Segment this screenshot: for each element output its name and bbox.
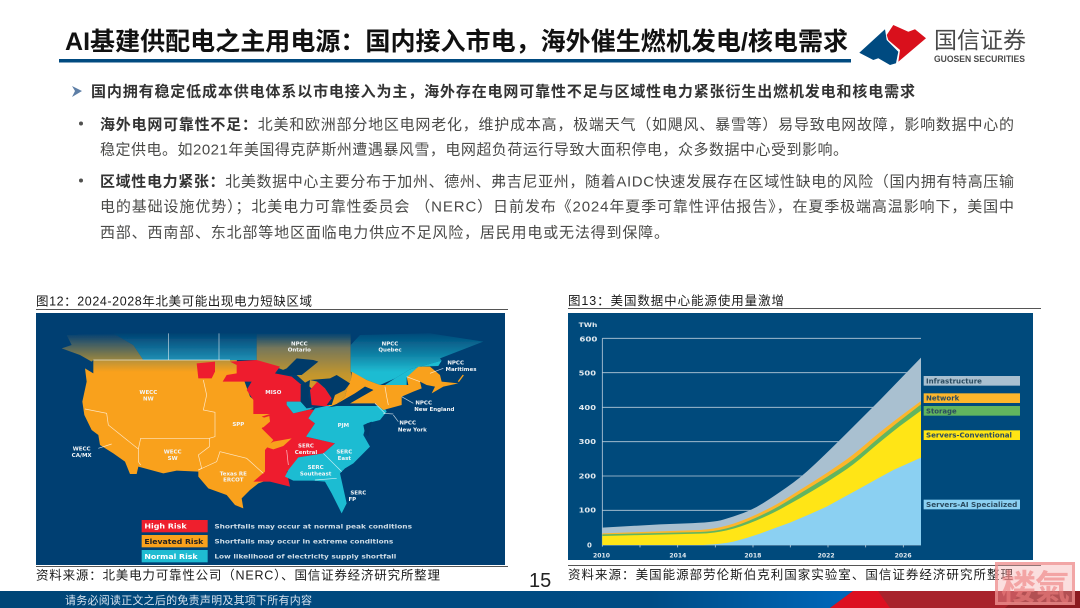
- gridlines and axis: [602, 338, 921, 547]
- map labels: NPCC: [291, 341, 308, 347]
- chart axis labels: 100: [579, 507, 596, 515]
- chart panel: US data center energy use: [568, 313, 1033, 560]
- chart axis labels: 600: [579, 336, 597, 344]
- page number: 15: [529, 570, 551, 592]
- map regions: [62, 333, 483, 513]
- chart axis labels: 0: [587, 541, 592, 549]
- logo: Guosen Securities: [859, 25, 1026, 65]
- map labels: NPCC: [382, 341, 398, 347]
- map labels: SPP: [232, 422, 244, 428]
- footer bar: [0, 591, 1080, 608]
- map labels: NPCC: [447, 361, 464, 367]
- chart axis labels: 2014: [669, 552, 686, 559]
- map panel: North America shortage risk: [36, 313, 505, 565]
- text block: grid reliability: 稳定供电。如2021年美国得克萨斯州遭遇暴风雪，电网超负荷运行导致大面积停电，众多数据中心受到影响。: [100, 142, 848, 158]
- chart legend: Storage: [926, 407, 957, 415]
- map labels: New York: [398, 428, 427, 434]
- map labels: WECC: [73, 447, 91, 453]
- map labels: NPCC: [415, 401, 432, 407]
- chart legend: Infrastructure: [926, 377, 983, 385]
- map labels: SERC: [298, 444, 314, 450]
- source: figure 12: 资料来源：北美电力可靠性公司（NERC）、国信证券经济研究所整理: [36, 568, 440, 582]
- chart legend: Network: [926, 394, 960, 402]
- map labels: Quebec: [378, 348, 402, 354]
- chart axis labels: 2010: [593, 552, 610, 559]
- map labels: [72, 341, 476, 503]
- map labels: FP: [348, 497, 356, 503]
- map labels: Central: [295, 450, 317, 456]
- map legend: Normal Risk: [144, 553, 198, 561]
- map legend: High Risk: [144, 523, 187, 531]
- map labels: NW: [143, 396, 154, 402]
- map legend: Shortfalls may occur at normal peak conditions: [214, 523, 412, 530]
- map labels: Texas RE: [220, 471, 247, 477]
- map labels: Ontario: [288, 348, 311, 354]
- map labels: PJM: [338, 423, 349, 429]
- logo: Guosen Securities: 国信证券: [934, 27, 1026, 53]
- map labels: SW: [168, 456, 178, 462]
- logo: Guosen Securities: GUOSEN SECURITIES: [934, 54, 1025, 64]
- text block: regional power shortage: 西部、西南部、东北部等地区面临电力供应不足风险，居民用电或无法得到保障。: [100, 224, 669, 242]
- text block: grid reliability: 海外电网可靠性不足：北美和欧洲部分地区电网老化，维护成本高，极端天气（如飓风、暴雪等）易导致电网故障，影响数据中心的: [100, 116, 1014, 134]
- chart axis labels: 500: [579, 369, 596, 377]
- footer bar: 请务必阅读正文之后的免责声明及其项下所有内容: [65, 593, 312, 607]
- text block: grid reliability: [79, 116, 1014, 158]
- map labels: WECC: [164, 450, 182, 456]
- text block: regional power shortage: [79, 172, 1014, 242]
- map labels: NPCC: [399, 420, 416, 426]
- lead bullet: 国内拥有稳定低成本供电体系以市电接入为主，海外存在电网可靠性不足与区域性电力紧张衍生出燃机发电和核电需求: [91, 82, 915, 100]
- map labels: Southeast: [300, 471, 332, 477]
- watermark stamp: 楼氣: [1001, 569, 1070, 608]
- map region boundaries: [85, 333, 443, 480]
- caption: figure 12: 图12：2024-2028年北美可能出现电力短缺区域: [36, 294, 312, 308]
- map labels: CA/MX: [72, 453, 92, 459]
- text block: regional power shortage: 电的基础设施优势）；北美电力可靠性委员会 （NERC）日前发布《2024年夏季可靠性评估报告》，在夏季极端高温影响下，美国中: [100, 198, 1014, 216]
- caption: figure 13: 图13：美国数据中心能源使用量激增: [568, 293, 784, 308]
- chart axis labels: 2022: [818, 552, 835, 559]
- chart legend: [924, 376, 1020, 509]
- chart axis labels: 300: [579, 438, 596, 446]
- chart axis labels: 200: [579, 472, 596, 480]
- map labels: SERC: [350, 491, 366, 497]
- map labels: WECC: [139, 390, 157, 396]
- chart axis labels: 2026: [895, 552, 912, 559]
- map labels: MISO: [265, 390, 282, 396]
- title: AI基建供配电之主用电源：国内接入市电，海外催生燃机发电/核电需求: [65, 27, 848, 56]
- map labels: New England: [414, 407, 455, 413]
- map legend: Elevated Risk: [144, 538, 204, 546]
- map labels: Maritimes: [446, 367, 476, 373]
- stacked area chart: [602, 358, 921, 545]
- chart axis labels: 2018: [744, 552, 761, 559]
- map legend: Low likelihood of electricity supply shortfall: [214, 553, 396, 560]
- chart axis labels: [579, 322, 912, 559]
- map labels: SERC: [308, 465, 324, 471]
- map labels: SERC: [336, 450, 352, 456]
- chart legend: Servers-AI Specialized: [926, 501, 1018, 509]
- chart axis labels: TWh: [579, 322, 598, 329]
- map labels: East: [338, 456, 351, 462]
- map labels: ERCOT: [223, 478, 244, 484]
- chart axis labels: 400: [579, 404, 596, 412]
- text block: regional power shortage: 区域性电力紧张：北美数据中心主要分布于加州、德州、弗吉尼亚州，随着AIDC快速发展存在区域性缺电的风险（国内拥有特高压输: [100, 172, 1014, 190]
- chart legend: Servers-Conventional: [926, 432, 1012, 440]
- map legend: Shortfalls may occur in extreme conditions: [214, 538, 394, 545]
- map legend: [142, 520, 412, 562]
- source: figure 13: 资料来源：美国能源部劳伦斯伯克利国家实验室、国信证券经济研究所整理: [568, 567, 1013, 582]
